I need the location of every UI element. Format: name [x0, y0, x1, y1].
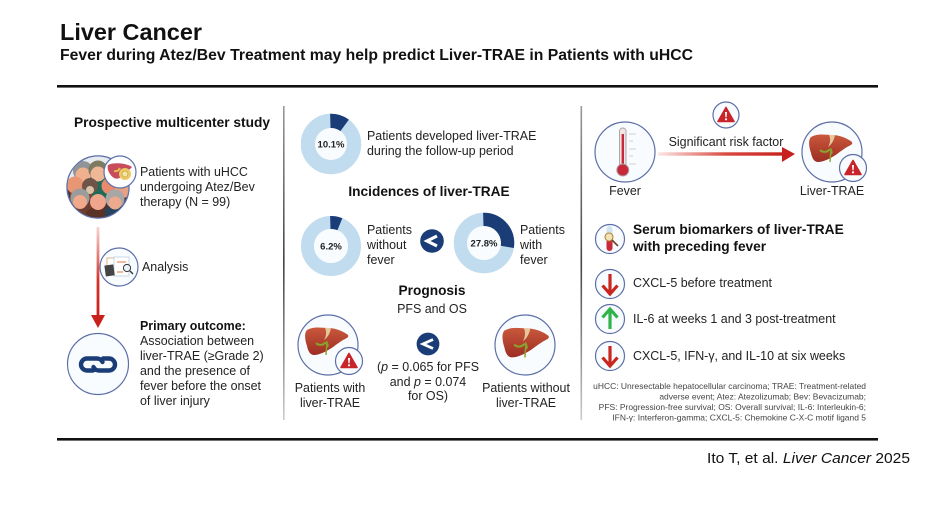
- heading: prognosis: Prognosis: [399, 283, 466, 298]
- text: patients without liver-TRAE: Patients without: [482, 381, 570, 395]
- text: fever: Fever: [609, 184, 641, 198]
- heading: serum biomarkers: with preceding fever: [632, 239, 767, 254]
- text: developed liver-TRAE: Patients developed liver-TRAE: [367, 129, 536, 143]
- text: patients without fever: Patients: [367, 223, 412, 237]
- text: patients without fever: without: [366, 238, 407, 252]
- text: patients with liver-TRAE: Patients with: [295, 381, 365, 395]
- text: patients with fever: with: [519, 238, 542, 252]
- icon: liver tumour badge: [104, 156, 136, 188]
- arrow: study flow: [91, 227, 105, 328]
- text: primary outcome: Association between: [140, 334, 254, 348]
- heading: prospective multicenter study: Prospective multicenter study: [74, 115, 270, 130]
- text: abbreviations footnote: adverse event; Atez: Atezolizumab; Bev: Bevacizumab;: [659, 392, 866, 402]
- text: p values: for OS): [408, 389, 448, 403]
- chart: fever donut 27.8%: [460, 220, 508, 266]
- icon: association link: [68, 334, 128, 394]
- text: patients with liver-TRAE: liver-TRAE: [300, 396, 360, 410]
- arrow: risk: [658, 147, 795, 162]
- icon: thermometer: [595, 122, 655, 182]
- text: primary outcome: liver-TRAE (≥Grade 2): [140, 349, 264, 363]
- text: patients without liver-TRAE: liver-TRAE: [496, 396, 556, 410]
- text: patients: therapy (N = 99): [140, 195, 230, 209]
- text: liver-TRAE: Liver-TRAE: [800, 184, 864, 198]
- heading: serum biomarkers: Serum biomarkers of liver-TRAE: [633, 222, 844, 237]
- panel: risk factor and biomarkers: [593, 102, 866, 422]
- icon: blood tube magnifier: [596, 224, 624, 254]
- chart: no fever donut 6.2%: [308, 222, 354, 270]
- icon: less than: [417, 333, 439, 355]
- icon: down arrow: [596, 270, 624, 298]
- panel: incidence and prognosis: [295, 121, 570, 410]
- text: analysis: Analysis: [142, 260, 188, 274]
- icon: up arrow: [596, 304, 624, 334]
- icon: less than: [420, 229, 444, 253]
- icon: warning: [713, 102, 739, 128]
- text: patients: Patients with uHCC: [140, 165, 248, 179]
- icon: liver with warning: [802, 122, 866, 182]
- text: abbreviations footnote: uHCC: Unresectable hepatocellular carcinoma; TRAE: Treatment-related: [593, 381, 866, 391]
- text: abbreviations footnote: IFN-γ: Interferon-gamma; CXCL-5: Chemokine C-X-C motif ligand 5: [612, 412, 866, 422]
- subtitle: Fever during Atez/Bev Treatment may help predict Liver-TRAE in Patients with uHCC: [60, 47, 693, 64]
- panel: study design: [60, 115, 270, 408]
- text: primary outcome: fever before the onset: [140, 379, 262, 393]
- text: primary outcome: and the presence of: [140, 364, 250, 378]
- citation: Ito T, et al. Liver Cancer 2025: [707, 450, 910, 467]
- text: patients: undergoing Atez/Bev: [140, 180, 256, 194]
- text: p values: (p = 0.065 for PFS: [377, 360, 479, 374]
- text: primary outcome: Primary outcome:: [140, 319, 246, 333]
- text: patients without fever: fever: [367, 253, 395, 267]
- text: patients with fever: Patients: [520, 223, 565, 237]
- chart: overall donut 10.1%: [308, 121, 354, 167]
- text: PFS and OS: PFS and OS: [397, 302, 467, 316]
- icon: patients group: [66, 155, 137, 219]
- chart: overall donut 10.1%: 10.1%: [318, 140, 345, 150]
- icon: analysis: [100, 248, 138, 286]
- icon: down arrow: [596, 342, 624, 370]
- text: developed liver-TRAE: during the follow-up period: [367, 144, 514, 158]
- chart: fever donut 27.8%: 27.8%: [471, 238, 498, 250]
- text: abbreviations footnote: PFS: Progression-free survival; OS: Overall survival; IL-6: Interleukin-6;: [599, 402, 866, 412]
- text: p values: and p = 0.074: [390, 375, 466, 389]
- icon: healthy liver: [495, 315, 555, 375]
- heading: incidences: Incidences of liver-TRAE: [348, 184, 510, 199]
- title: Liver Cancer: [60, 19, 202, 45]
- text: IL-6: IL-6 at weeks 1 and 3 post-treatment: [633, 312, 836, 326]
- icon: liver with warning: [298, 315, 362, 375]
- text: primary outcome: of liver injury: [140, 394, 211, 408]
- text: CXCL-5 before treatment: CXCL-5 before treatment: [633, 276, 772, 290]
- text: patients with fever: fever: [520, 253, 548, 267]
- text: CXCL-5 IFN IL-10: CXCL-5, IFN-γ, and IL-10 at six weeks: [633, 349, 845, 363]
- text: significant risk factor: Significant risk factor: [669, 135, 783, 149]
- chart: no fever donut 6.2%: 6.2%: [320, 242, 342, 252]
